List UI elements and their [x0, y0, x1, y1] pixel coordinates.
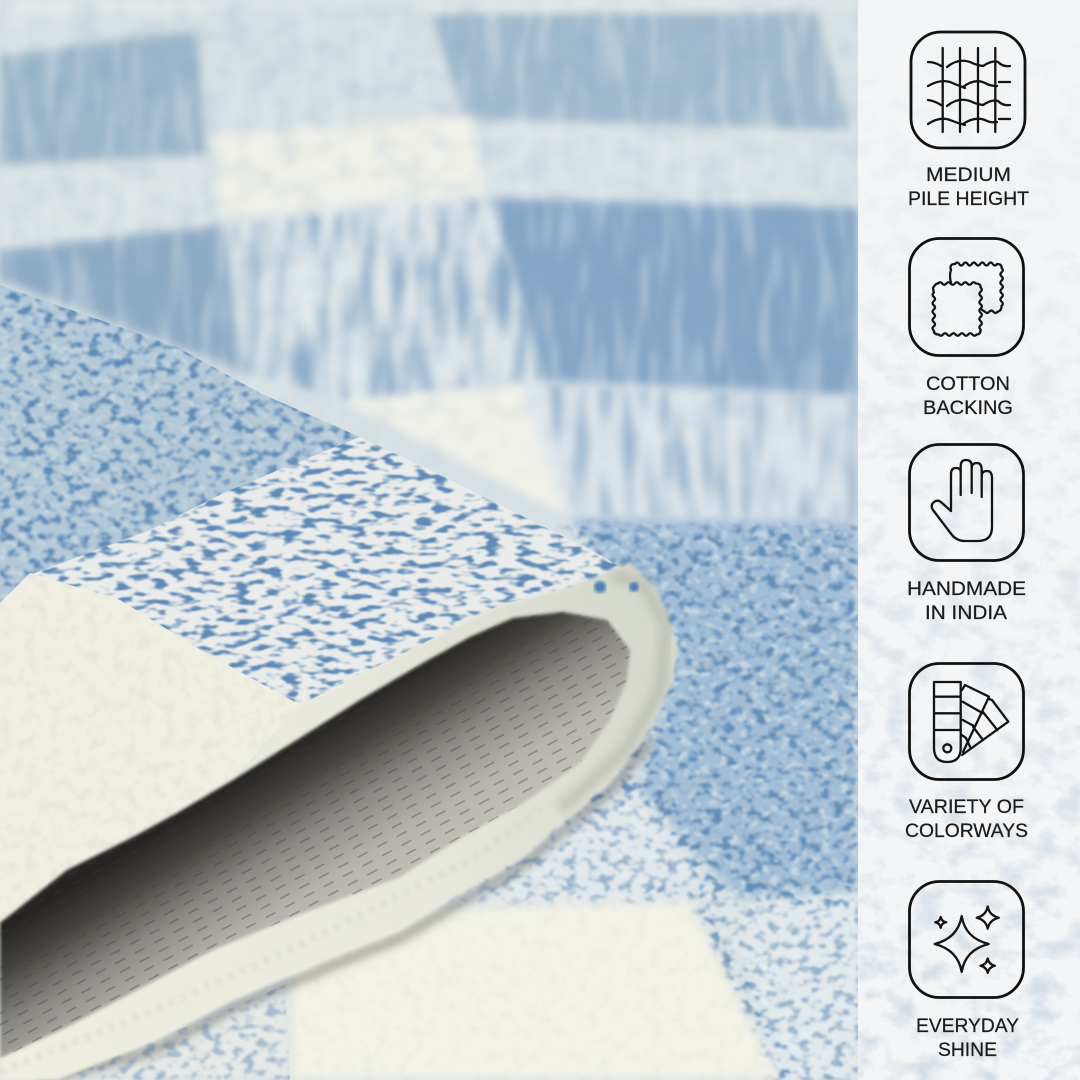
ribbed stitches on the right check [544, 383, 858, 522]
feature: everyday shine [910, 882, 1024, 1061]
label line 2: IN INDIA [925, 602, 1007, 624]
label: EVERYDAY [916, 1015, 1019, 1037]
soft mottling on the out-of-focus floor [0, 0, 858, 440]
icon: sparkles [910, 882, 1024, 998]
blue check on roll [0, 285, 380, 615]
icon: pile fibres [911, 32, 1025, 148]
label: MEDIUM [926, 164, 1011, 186]
rolled rug top surface [0, 285, 660, 930]
panel: product features [858, 0, 1080, 1080]
whiter mix around the lower check [440, 800, 858, 1080]
feature: cotton backing [910, 238, 1024, 419]
rug floor check pattern [0, 2, 858, 902]
feature: medium pile height [908, 32, 1029, 210]
light check on roll [33, 437, 620, 703]
feature: handmade in India [907, 444, 1026, 624]
icon: fabric swatches [910, 238, 1024, 356]
label line 2: BACKING [923, 397, 1013, 419]
label: COTTON [926, 373, 1010, 395]
label: HANDMADE [907, 578, 1026, 600]
sharp knots on the lower floor [430, 500, 858, 1080]
rug underside: grey cotton backing [0, 600, 640, 1070]
feature: variety of colorways [905, 664, 1028, 842]
icon: colour fan deck [910, 664, 1024, 780]
photo: rolled checked rug [0, 0, 858, 1080]
icon: hand [910, 444, 1024, 560]
bottom cream check [40, 900, 780, 1080]
label line 2: COLORWAYS [905, 820, 1028, 842]
label: VARIETY OF [909, 796, 1024, 818]
rug rolled edge binding [0, 563, 678, 1080]
ribbed stitches on the centre check [231, 196, 545, 402]
label line 2: PILE HEIGHT [908, 188, 1029, 210]
cream check on roll [0, 573, 294, 919]
label line 2: SHINE [938, 1039, 997, 1061]
shadow below the rolled edge [40, 740, 650, 1080]
